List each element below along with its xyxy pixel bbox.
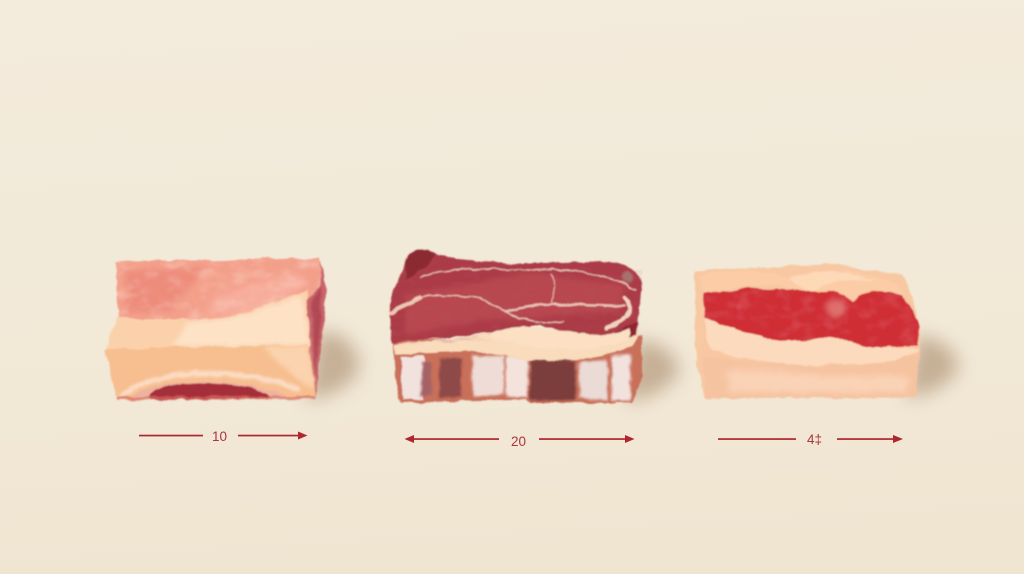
meat block 3 — [695, 263, 920, 399]
right side — [306, 260, 326, 397]
bones — [401, 356, 424, 400]
fat rings — [122, 373, 300, 397]
lean eye — [148, 383, 270, 400]
shadow block 2 — [626, 340, 678, 402]
fat strip — [394, 330, 640, 360]
shadow block 1 — [306, 332, 359, 400]
arrow label 3: 4‡: 4‡ — [807, 432, 822, 447]
arrow label 1: 10: 10 — [212, 429, 227, 444]
arrow label 2: 20 — [404, 434, 634, 449]
lean red — [703, 287, 920, 347]
arrow label 2: 20: 20 — [511, 434, 526, 449]
top face: pink lean — [116, 258, 321, 325]
lower front — [703, 352, 920, 399]
meat block 1 — [105, 258, 326, 400]
upper fat ridge — [700, 271, 904, 300]
arrow label 3: 4‡ — [718, 432, 903, 447]
steak top face — [390, 250, 642, 343]
top face: cream fat — [105, 290, 310, 352]
front face — [105, 345, 316, 399]
dark crust — [405, 251, 436, 280]
shadow block 3 — [906, 336, 958, 398]
arrow label 1: 10 — [139, 429, 308, 444]
meat block 2 — [390, 250, 642, 403]
mid fat band — [705, 317, 920, 365]
fat body — [695, 263, 920, 399]
lower steak fat — [488, 327, 630, 349]
marbling — [392, 269, 636, 328]
lower rib section — [393, 335, 642, 403]
